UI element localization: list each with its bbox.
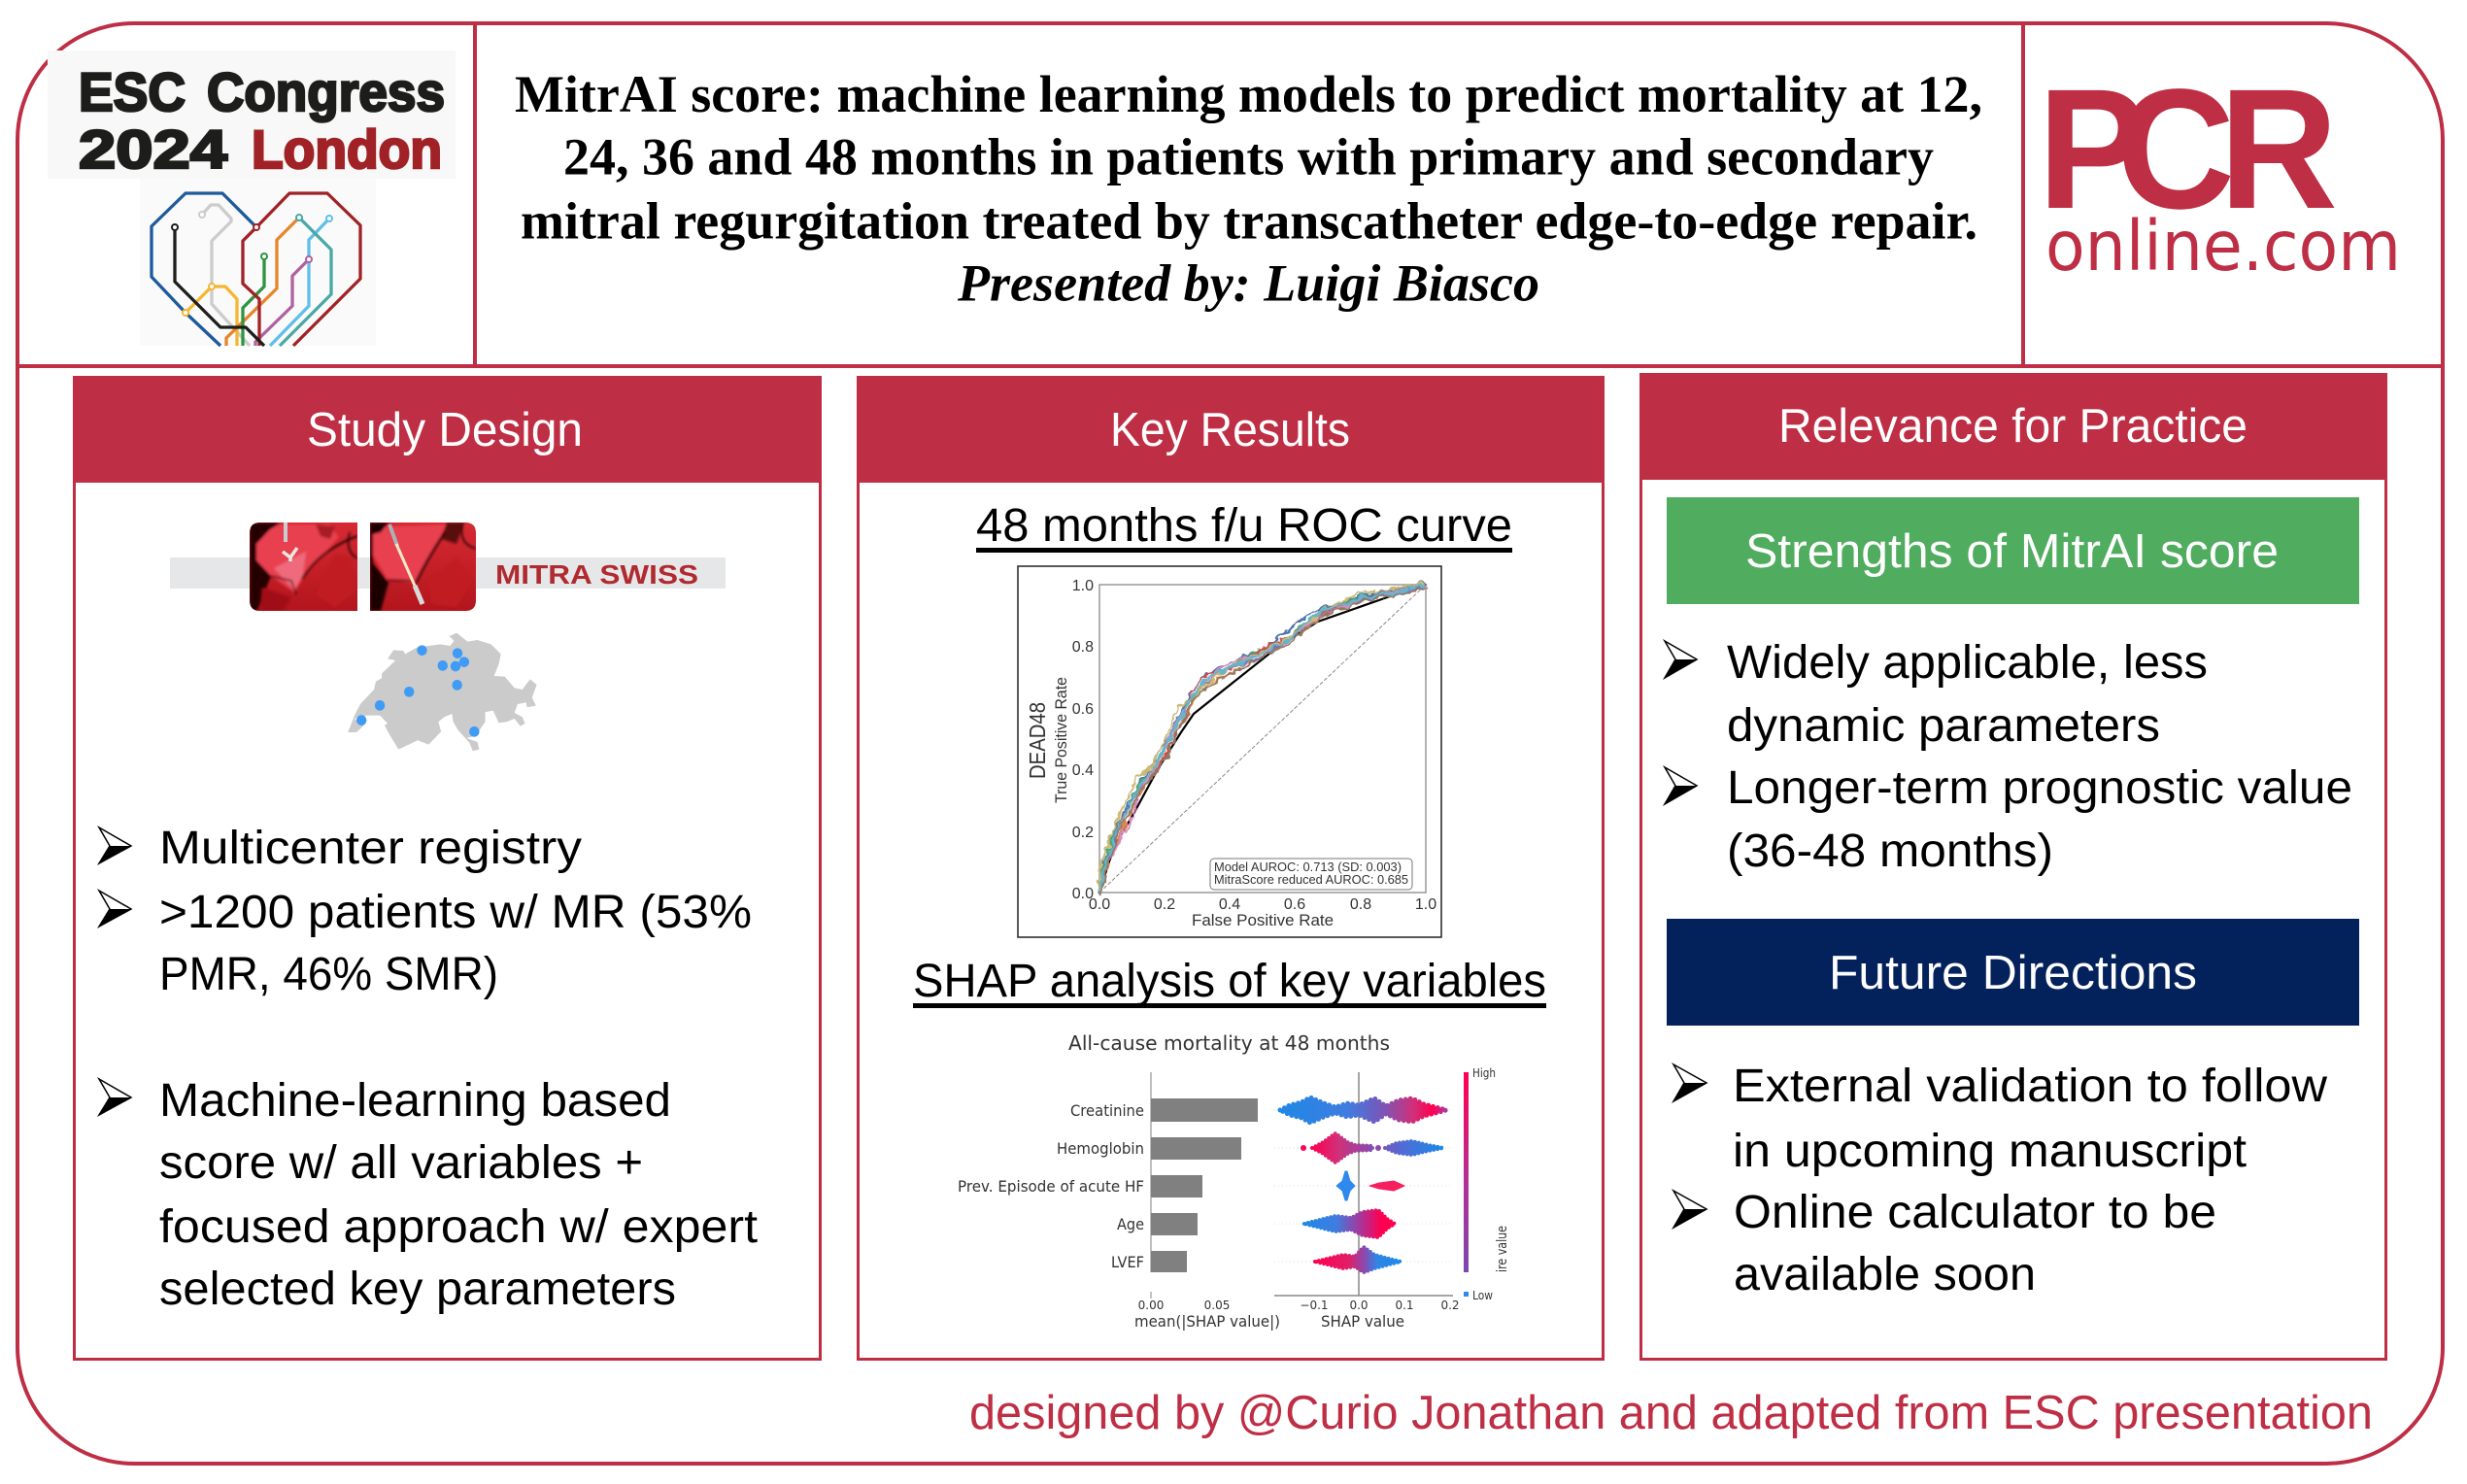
icon: arrow bullet: [1665, 641, 1697, 678]
chart: SHAP analysis: [958, 1031, 1510, 1331]
panel: key results: Key Results: [1110, 404, 1350, 456]
icon: arrow bullet: [1673, 1191, 1707, 1228]
coloured model curves: [1098, 583, 1428, 895]
legend box: MitraScore reduced AUROC: 0.685: [1214, 873, 1408, 887]
strengths bullet list: Widely applicable, less: [1727, 637, 2208, 689]
icon: arrow bullet: [1665, 767, 1697, 804]
y axis tick labels: 0.8: [1072, 639, 1094, 656]
Mitra Swiss banner: [170, 523, 726, 611]
PCR online.com logo: [2038, 54, 2401, 287]
strengths bullet list: (36-48 months): [1727, 826, 2053, 877]
beeswarm plot: SHAP value: −0.1: [1300, 1298, 1329, 1312]
PCR online.com logo: P: [2038, 54, 2147, 245]
x axis tick labels: 0.8: [1350, 896, 1371, 913]
heading: Study Design: [73, 376, 822, 483]
title: 24, 36 and 48 months in patients with primary and secondary: [563, 128, 1934, 186]
subheading: ROC curve: 48 months f/u ROC curve: [976, 500, 1512, 552]
heading: Key Results: [857, 376, 1605, 483]
study design bullet list: score w/ all variables +: [159, 1137, 643, 1189]
strengths bullet list: [1665, 637, 2352, 877]
black reference curve: [1099, 585, 1426, 893]
colour bar legend: Low: [1472, 1289, 1493, 1302]
y axis tick labels: 1.0: [1072, 578, 1094, 594]
beeswarm plot: SHAP value: [1274, 1072, 1460, 1331]
footer credit: designed by @Curio Jonathan and adapted from ESC presentation: [969, 1387, 2373, 1439]
y axis tick labels: 0.4: [1072, 762, 1094, 779]
image: clip closed, left: [250, 523, 357, 611]
future directions bullet list: [1673, 1061, 2327, 1300]
x axis tick labels: 1.0: [1415, 896, 1436, 913]
bar chart: mean SHAP value: Age: [1117, 1215, 1144, 1233]
logo text: London: London: [252, 118, 442, 180]
y axis tick labels: 0.6: [1072, 701, 1094, 718]
strengths banner: [1667, 497, 2359, 604]
image: clip in place, right: [370, 523, 476, 611]
logo text: online.com: online.com: [2045, 206, 2401, 287]
title: MitrAI score: machine learning models to predict mortality at 12,: [515, 65, 1982, 123]
future directions bullet list: in upcoming manuscript: [1733, 1126, 2247, 1177]
logo text: 2024: 2024: [79, 118, 227, 180]
study design bullet list: focused approach w/ expert: [159, 1201, 758, 1253]
study design bullet list: selected key parameters: [159, 1264, 676, 1315]
future directions bullet list: available soon: [1734, 1249, 2036, 1300]
bar chart: mean SHAP value: Creatinine: [1070, 1101, 1144, 1120]
colour bar legend: ire value: [1495, 1226, 1510, 1272]
icon: arrow bullet: [1673, 1064, 1707, 1101]
logo text: Congress: Congress: [207, 61, 445, 122]
icon: arrow bullet: [99, 891, 131, 927]
chart: ROC curve: [1018, 566, 1441, 937]
colour bar legend: [1464, 1066, 1510, 1302]
y axis title: True Positive Rate: [1052, 677, 1070, 803]
bar chart: mean SHAP value: 0.00: [1138, 1298, 1164, 1312]
title: mitral regurgitation treated by transcatheter edge-to-edge repair.: [521, 192, 1977, 251]
ESC Congress 2024 London logo: [48, 51, 456, 180]
legend box: [1210, 859, 1412, 890]
bar chart: mean SHAP value: mean(|SHAP value|): [1134, 1312, 1280, 1331]
title: [515, 65, 1982, 313]
PCR online.com logo: R: [2219, 54, 2338, 245]
bar chart: mean SHAP value: Prev. Episode of acute HF: [958, 1177, 1144, 1196]
y axis tick labels: 0.2: [1072, 825, 1094, 841]
icon: arrow bullet: [99, 827, 131, 863]
panel: relevance for practice: [1639, 373, 2387, 1360]
study design bullet list: Machine-learning based: [159, 1075, 671, 1127]
chart title: All-cause mortality at 48 months: [1068, 1031, 1390, 1055]
logo text: ESC: ESC: [79, 61, 186, 122]
beeswarm plot: SHAP value: SHAP value: [1321, 1312, 1404, 1331]
panel: relevance for practice: Relevance for Practice: [1778, 400, 2247, 453]
map: Switzerland with centers: [348, 633, 537, 751]
bar chart: mean SHAP value: Hemoglobin: [1057, 1139, 1144, 1158]
x axis tick labels: 0.0: [1089, 896, 1110, 913]
colour bar legend: High: [1472, 1066, 1496, 1080]
row label DEAD48: DEAD48: [1025, 702, 1050, 779]
y axis tick labels: 0.0: [1072, 886, 1094, 902]
icon: arrow bullet: [99, 1079, 131, 1115]
strengths bullet list: Longer-term prognostic value: [1727, 762, 2352, 814]
heading: Relevance for Practice: [1639, 373, 2387, 480]
beeswarm plot: SHAP value: 0.2: [1440, 1298, 1460, 1312]
PCR online.com logo: C: [2116, 54, 2235, 245]
study design bullet list: [99, 823, 758, 1315]
study design bullet list: Multicenter registry: [159, 823, 582, 874]
beeswarm plot: SHAP value: 0.1: [1395, 1298, 1414, 1312]
bar chart: mean SHAP value: 0.05: [1204, 1298, 1230, 1312]
header divider lines: [17, 23, 2443, 366]
x axis tick labels: 0.4: [1219, 896, 1240, 913]
future directions banner: [1667, 919, 2359, 1026]
panel: study design: Study Design: [307, 404, 583, 456]
y axis tick labels: [1072, 578, 1094, 902]
study design bullet list: >1200 patients w/ MR (53%: [159, 887, 752, 938]
x axis tick labels: 0.2: [1154, 896, 1175, 913]
bar chart: mean SHAP value: LVEF: [1111, 1253, 1144, 1271]
panel: key results: [857, 376, 1605, 1360]
strengths banner: Strengths of MitrAI score: [1745, 525, 2279, 578]
bar chart: mean SHAP value: [958, 1072, 1280, 1331]
x axis tick labels: 0.6: [1284, 896, 1305, 913]
future directions banner: Future Directions: [1829, 947, 2197, 999]
panel: study design: [73, 376, 822, 1360]
study design bullet list: PMR, 46% SMR): [159, 949, 498, 1000]
x axis tick labels: [1089, 896, 1436, 913]
beeswarm plot: SHAP value: 0.0: [1349, 1298, 1369, 1312]
icon: metro-line heart: [140, 179, 376, 346]
strengths bullet list: dynamic parameters: [1727, 700, 2160, 752]
legend box: Model AUROC: 0.713 (SD: 0.003): [1214, 860, 1402, 874]
presenter line: Presented by: Luigi Biasco: [957, 254, 1539, 313]
subheading: SHAP analysis: SHAP analysis of key variables: [913, 956, 1546, 1007]
future directions bullet list: Online calculator to be: [1734, 1187, 2216, 1238]
banner text: MITRA SWISS: [495, 559, 698, 590]
x axis title: False Positive Rate: [1192, 911, 1334, 929]
future directions bullet list: External validation to follow: [1733, 1061, 2327, 1112]
